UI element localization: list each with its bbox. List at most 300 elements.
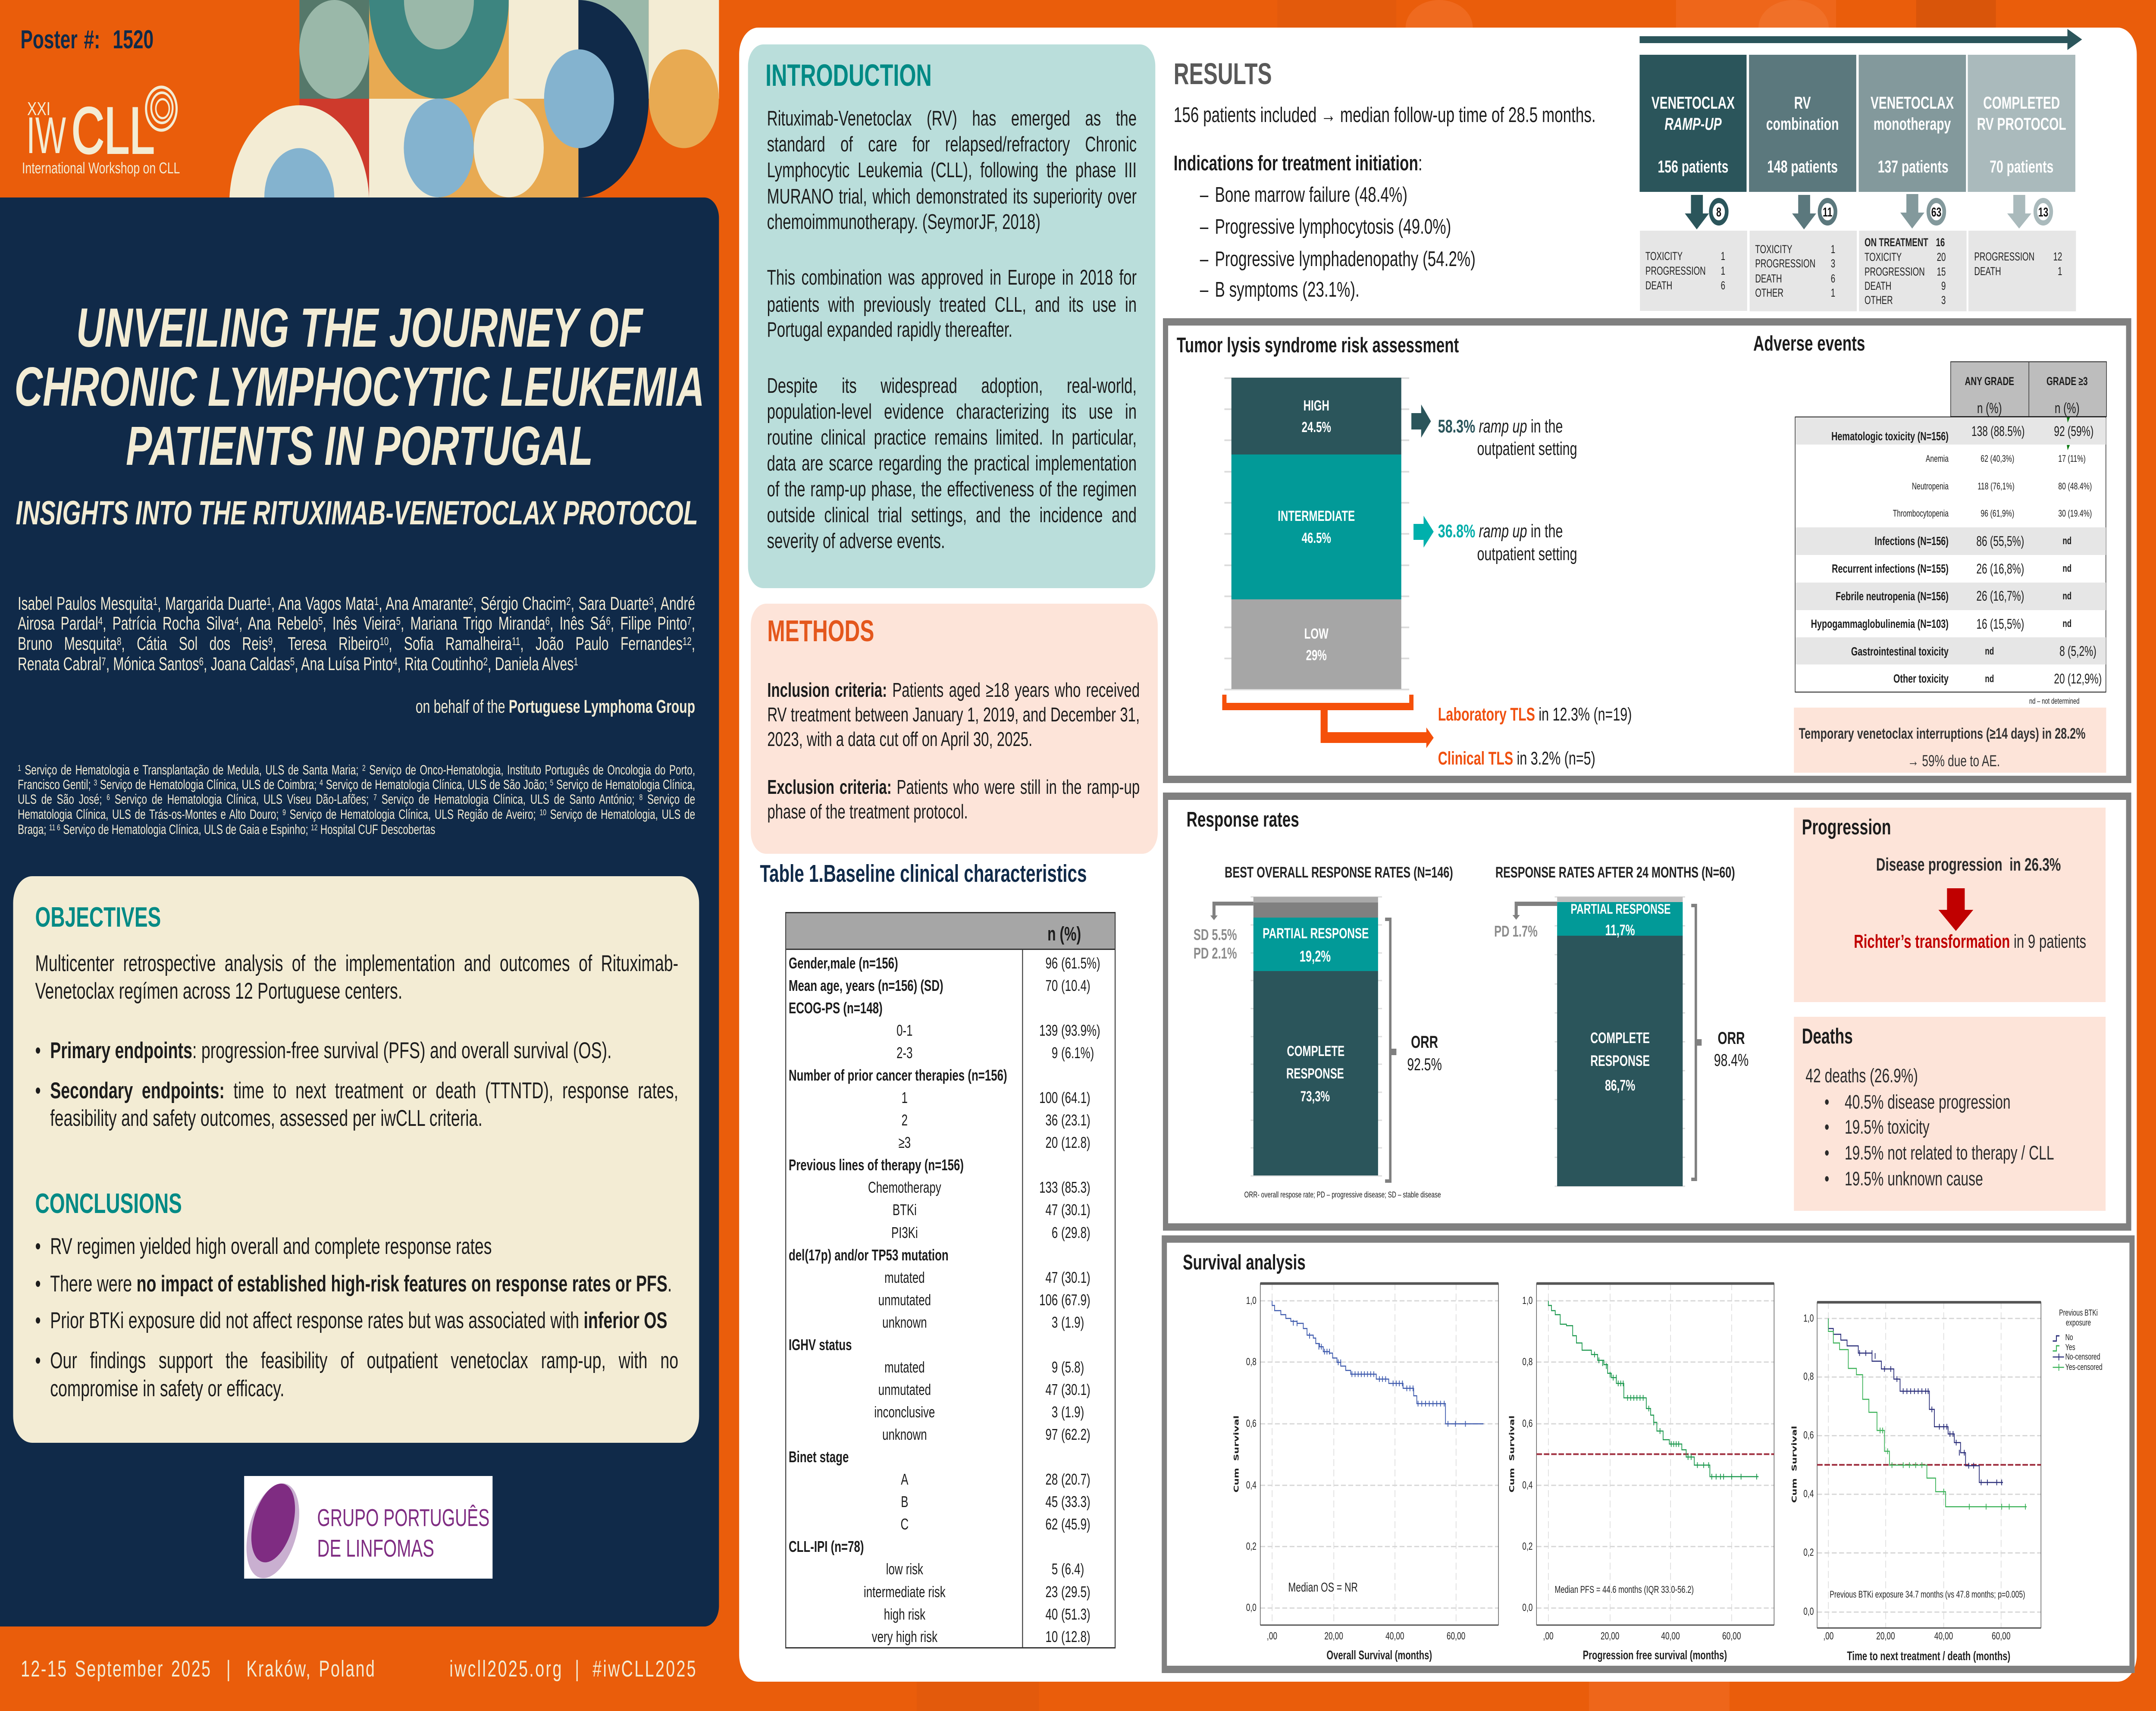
endpoints [35,1039,678,1130]
box: RV combination reasons: 3 [1831,257,1835,270]
axis labels: overall survival plot: 0,6 [1246,1418,1257,1429]
table: adverse events: 8 (5,2%) [2059,643,2096,659]
title: CHRONIC LYMPHOCYTIC LEUKEMIA [14,356,705,418]
introduction text: outside clinical trial settings, and the incidence and [767,504,1137,527]
table: baseline characteristics: (30.1) [1061,1381,1091,1398]
phase: ramp-up: 156 patients [1658,157,1728,176]
logo: Grupo Português de Linfomas: GRUPO PORTUGUÊS [317,1504,489,1532]
subtitle: INSIGHTS INTO THE RITUXIMAB-VENETOCLAX PROTOCOL [16,494,698,532]
objectives text [35,952,678,992]
introduction text [767,108,1137,557]
table: adverse events: nd [2062,535,2071,547]
chart: response after 24 months bar: ORR [1718,1029,1745,1048]
table: baseline characteristics: C [901,1515,909,1533]
phase: monotherapy: VENETOCLAX [1871,94,1954,113]
chart: TLS risk stacked bar: 46.5% [1302,530,1331,546]
legend: previous BTKi exposure: exposure [2066,1318,2091,1328]
axis labels: TTNTD plot: ,00 [1823,1630,1833,1642]
box: ramp-up reasons: 1 [1721,264,1725,277]
heading: results: RESULTS [1174,57,1272,91]
arrow: progression to Richter [1938,888,1973,931]
table: baseline characteristics: 100 [1039,1089,1058,1106]
table: baseline characteristics: CLL-IPI (n=78) [789,1538,864,1555]
panel: deaths: • [1824,1142,1829,1164]
table: adverse events: 80 (48.4%) [2058,481,2092,492]
box: ramp-up reasons [1640,231,1747,311]
chart: TLS risk stacked bar: 24.5% [1302,419,1331,436]
callout: venetoclax interruptions: Temporary venetoclax interruptions (≥14 days) in 28.2% [1799,725,2085,742]
table: adverse events: 26 (16,7%) [1976,588,2024,604]
phase: monotherapy [1859,55,1966,192]
table: baseline characteristics: (1.9) [1061,1403,1084,1421]
panel: deaths: Deaths [1802,1024,1853,1048]
axis labels: TTNTD plot: 0,6 [1803,1429,1814,1441]
conclusions list: • [35,1271,41,1297]
table: baseline characteristics: (12.8) [1061,1628,1091,1645]
table: baseline characteristics: 36 [1045,1111,1058,1129]
table: baseline characteristics: (61.5%) [1061,954,1100,972]
bracket arrow: TLS incidence [1222,694,1435,749]
axis labels: TTNTD plot: 0,2 [1803,1547,1814,1558]
table: baseline characteristics: mutated [884,1358,925,1376]
box: monotherapy reasons: PROGRESSION [1865,265,1925,278]
phase: completed: RV PROTOCOL [1977,115,2066,134]
box: completed reasons: 12 [2053,250,2062,263]
panel: introduction [748,44,1155,588]
table: baseline characteristics: 5 [1052,1560,1058,1578]
callout: high risk outpatient: 58.3% ramp up in the [1438,416,1563,437]
table: adverse events: ANY GRADE [1965,375,2014,388]
axis labels: TTNTD plot: 0,0 [1803,1606,1814,1617]
phase: RV combination: combination [1766,115,1839,134]
table: baseline characteristics: 2-3 [896,1044,913,1062]
axis labels: PFS plot: 0,0 [1522,1602,1532,1614]
chart: best overall response bar: ORR [1411,1033,1438,1052]
table: adverse events: 92 (59%) [2054,423,2093,439]
table: baseline characteristics: 3 [1052,1313,1058,1331]
conclusions list: • [35,1348,41,1373]
heading: adverse events: Adverse events [1753,332,1865,355]
box: monotherapy reasons: 3 [1941,294,1946,307]
box: completed reasons: 1 [2058,265,2062,278]
table: adverse events: 118 (76,1%) [1977,481,2015,492]
endpoints: • [35,1078,41,1103]
table: adverse events: nd [2062,590,2071,602]
callout: venetoclax interruptions [1794,708,2106,773]
arrows: discontinuation counts: 8 [1716,204,1721,219]
axis labels: TTNTD plot: 40,00 [1934,1630,1953,1642]
chart: Kaplan-Meier curves [1161,1229,2139,1682]
methods text: 2023, with a data cut off on April 30, 2025. [767,728,1032,750]
introduction text: data are scarce regarding the practical implementation [767,452,1137,475]
box: RV combination reasons: OTHER [1755,286,1783,299]
conclusions list: • [35,1308,41,1333]
axis labels: PFS plot: 1,0 [1522,1295,1532,1307]
axis labels: overall survival plot: 0,2 [1246,1541,1257,1552]
introduction text: This combination was approved in Europe in 2018 for [767,266,1137,289]
results summary: 156 patients included → median follow-up time of 28.5 months. [1174,103,1596,127]
phase: RV combination: RV [1794,94,1811,113]
axis labels: overall survival plot: 40,00 [1385,1630,1404,1642]
introduction text: MURANO trial, which demonstrated its superiority over [767,185,1137,208]
axis labels: TTNTD plot: Previous BTKi exposure 34.7 months (vs 47.8 months; p=0.005) [1830,1589,2025,1600]
box: monotherapy reasons: ON TREATMENT [1865,236,1928,249]
chart: response after 24 months bar: PARTIAL RESPONSE [1570,901,1671,917]
callout: high risk outpatient [1438,417,1566,459]
table: adverse events: 62 (40,3%) [1981,453,2014,464]
table: baseline characteristics: 0-1 [896,1022,913,1039]
introduction text: patients with previously treated CLL, and its use in [767,293,1137,317]
table: baseline characteristics: (6.4) [1061,1560,1084,1578]
box: completed reasons [1968,231,2076,311]
chart: best overall response bar: PARTIAL RESPONSE [1263,925,1369,942]
chart: response after 24 months bar: RESPONSE [1590,1053,1650,1069]
footer: website and hashtag: iwcll2025.org | #iwCLL2025 [449,1656,697,1682]
arrows: discontinuation counts: 13 [2038,204,2048,219]
title: PATIENTS IN PORTUGAL [126,415,593,477]
arrow: high risk [1411,404,1431,438]
axis labels: TTNTD plot: 0,4 [1803,1488,1814,1500]
legend: previous BTKi exposure: Yes-censored [2065,1363,2103,1372]
table: baseline characteristics: B [901,1493,908,1510]
introduction text: of the ramp-up phase, the effectiveness of the regimen [767,478,1137,501]
table: baseline characteristics: inconclusive [874,1403,935,1421]
axis labels: overall survival plot: 20,00 [1324,1630,1343,1642]
table: baseline characteristics: Previous lines of therapy (n=156) [789,1156,964,1174]
indications list: – [1200,247,1208,271]
on behalf of group: on behalf of the Portuguese Lymphoma Group [416,697,695,717]
table: baseline characteristics [785,912,1116,1648]
table: baseline characteristics: 9 [1052,1044,1058,1062]
box: RV combination reasons: PROGRESSION [1755,257,1815,270]
box: RV combination reasons: DEATH [1755,272,1782,285]
panel: progression: Richter’s transformation in 9 patients [1854,931,2086,952]
table: baseline characteristics: (29.8) [1061,1224,1091,1241]
box: monotherapy reasons [1859,231,1967,311]
chart: TLS risk stacked bar: HIGH [1304,398,1329,414]
table: adverse events: Neutropenia [1912,481,1949,492]
table: adverse events: Gastrointestinal toxicity [1851,645,1949,658]
chart: best overall response bar [1189,896,1433,1185]
affiliations [18,763,695,837]
table: baseline characteristics: IGHV status [789,1336,852,1354]
phase: completed [1968,55,2075,192]
panel: deaths: 19.5% unknown cause [1845,1168,1983,1190]
arrow: timeline [1639,29,2082,50]
arrow: intermediate risk [1413,516,1434,548]
table: baseline characteristics: 70 [1045,977,1058,994]
axis labels: PFS plot: 0,6 [1522,1418,1532,1429]
table: adverse events: 17 (11%) [2058,453,2086,464]
box: completed reasons: DEATH [1974,265,2001,278]
callout: high risk outpatient: outpatient setting [1477,439,1577,459]
conclusions list: compromise in safety or efficacy. [50,1376,285,1401]
chart: best overall response bar: SD 5.5% [1194,926,1237,943]
subheading: after 24 months: RESPONSE RATES AFTER 24 MONTHS (N=60) [1495,864,1735,881]
panel: progression: Disease progression in 26.3% [1876,854,2061,874]
table: adverse events: 86 (55,5%) [1976,533,2024,549]
table: baseline characteristics: 47 [1045,1381,1058,1398]
box: monotherapy reasons: 9 [1941,279,1946,292]
phase: monotherapy: 137 patients [1878,157,1949,176]
panel: deaths [1794,1017,2106,1211]
panel: deaths: • [1824,1091,1829,1113]
axis labels: overall survival plot: Cum Survival [1232,1416,1241,1492]
methods text: RV treatment between January 1, 2019, and December 31, [767,703,1140,726]
box: completed reasons: PROGRESSION [1974,250,2034,263]
box: ramp-up reasons: TOXICITY [1645,250,1683,263]
table: baseline characteristics: (51.3) [1061,1605,1091,1623]
phase: RV combination: 148 patients [1767,157,1838,176]
heading: TLS: Tumor lysis syndrome risk assessment [1177,333,1459,357]
endpoints: Secondary endpoints: time to next treatment or death (TTNTD), response rates, [50,1078,678,1103]
callout: laboratory TLS: Laboratory TLS in 12.3% (n=19) [1438,704,1632,725]
chart: response after 24 months bar: 86,7% [1605,1077,1635,1094]
chart: response after 24 months bar: 11,7% [1605,922,1635,939]
legend: previous BTKi exposure: No-censored [2065,1352,2100,1362]
table: adverse events: Anemia [1926,453,1949,464]
axis labels: PFS plot: 60,00 [1722,1630,1741,1642]
heading: introduction: INTRODUCTION [765,59,932,93]
box: monotherapy reasons: 16 [1936,236,1945,249]
table: baseline characteristics: 47 [1045,1269,1058,1286]
axis labels: overall survival plot: 0,0 [1246,1602,1257,1614]
table: baseline characteristics: unknown [882,1313,927,1331]
table: baseline characteristics: 1 [902,1089,908,1106]
axis labels: PFS plot: 0,4 [1522,1479,1532,1491]
objectives text: Venetoclax regímen across 12 Portuguese centers. [35,978,402,1004]
boxes: discontinuation reasons [1640,231,2076,311]
callout: intermediate risk outpatient [1438,522,1566,564]
panel: title and authors [0,197,719,1626]
title: UNVEILING THE JOURNEY OF [76,297,643,359]
legend: previous BTKi exposure: Yes [2065,1343,2075,1352]
table: baseline characteristics: (62.2) [1061,1426,1091,1443]
callout: venetoclax interruptions: → 59% due to AE. [1908,752,2000,770]
endpoints: feasibility and safety outcomes, assessed per iwCLL criteria. [50,1106,483,1131]
conclusions list [35,1235,678,1403]
axis labels: overall survival plot: Overall Survival (months) [1326,1648,1432,1662]
table: baseline characteristics: 9 [1052,1358,1058,1376]
indications list: B symptoms (23.1%). [1215,278,1360,301]
panel: main white panel [739,28,2137,1682]
logo: Grupo Português de Linfomas: DE LINFOMAS [317,1535,434,1562]
table: baseline characteristics: 133 [1039,1178,1058,1196]
authors: Bruno Mesquita8, Cátia Sol dos Reis9, Teresa Ribeiro10, Sofia Ramalheira11, João Paulo Fernandes12, [18,634,695,654]
indications list: Indications for treatment initiation: [1174,151,1423,175]
table: baseline characteristics: 139 [1039,1022,1058,1039]
table: adverse events: 26 (16,8%) [1976,561,2024,577]
chart: best overall response bar: 92.5% [1407,1055,1442,1074]
table: baseline characteristics: (45.9) [1061,1515,1091,1533]
heading: methods: METHODS [767,614,874,648]
axis labels: PFS plot: 20,00 [1601,1630,1619,1642]
chart: best overall response bar: 73,3% [1300,1088,1330,1105]
table: adverse events: nd [1985,673,1994,685]
table: adverse events: 96 (61,9%) [1981,508,2014,519]
table: baseline characteristics: 97 [1045,1426,1058,1443]
table: baseline characteristics: 2 [902,1111,908,1129]
table: adverse events: Infections (N=156) [1874,534,1949,548]
axis labels: TTNTD plot [1787,1311,2047,1664]
poster number: Poster #: 1520 [20,25,154,54]
table: baseline characteristics: (20.7) [1061,1470,1091,1488]
axis labels: overall survival plot: 0,4 [1246,1479,1257,1491]
authors [18,595,695,673]
axis labels: PFS plot: 0,8 [1522,1356,1532,1368]
axis labels: PFS plot: ,00 [1543,1630,1554,1642]
logo: Grupo Português de Linfomas [244,1476,492,1579]
table: baseline characteristics: (23.1) [1061,1111,1091,1129]
affiliations: ULS de São José; 6 Serviço de Hematologia Clínica, ULS Viseu Dão-Lafões; 7 Serviço de Hematologia Clínica, ULS de Santo António; 8 Serviço de [18,791,695,807]
table: baseline characteristics: Number of prior cancer therapies (n=156) [789,1066,1007,1084]
methods text: Exclusion criteria: Patients who were still in the ramp-up [767,776,1140,798]
indications list: Progressive lymphocytosis (49.0%) [1215,215,1451,238]
endpoints: Primary endpoints: progression-free survival (PFS) and overall survival (OS). [50,1038,612,1063]
table: baseline characteristics: 47 [1045,1201,1058,1219]
panel: deaths: 42 deaths (26.9%) [1805,1065,1918,1087]
panel: survival frame [1162,1235,2134,1673]
box: RV combination reasons: 1 [1831,286,1835,299]
axis labels: PFS plot: 40,00 [1661,1630,1680,1642]
table: baseline characteristics: mutated [884,1269,925,1286]
callout: intermediate risk outpatient: 36.8% ramp up in the [1438,521,1563,542]
table: baseline characteristics: 10 [1045,1628,1058,1645]
table: baseline characteristics: Gender,male (n=156) [789,954,898,972]
panel: objectives and conclusions [13,876,699,1443]
chart: response after 24 months bar: COMPLETE [1590,1030,1650,1047]
indications list [1174,151,1510,302]
phase: RV combination [1749,55,1856,192]
panel: response rates frame [1163,793,2131,1231]
box: ramp-up reasons: 6 [1721,279,1725,292]
table: baseline characteristics: high risk [884,1605,925,1623]
chart: best overall response bar: PD 2.1% [1194,944,1237,962]
legend: previous BTKi exposure: No [2065,1333,2073,1342]
indications list: – [1200,215,1208,238]
table: baseline characteristics: Chemotherapy [868,1178,941,1196]
authors: Renata Cabral7, Mónica Santos6, Joana Caldas5, Ana Luísa Pinto4, Rita Coutinho2, Daniela Alves1 [18,654,578,674]
footnote: response abbreviations: ORR- overall respose rate; PD – progressive disease; SD – stable disease [1244,1190,1441,1200]
chart: response after 24 months bar: 98.4% [1714,1051,1749,1070]
box: monotherapy reasons: OTHER [1865,294,1893,307]
table: adverse events: Recurrent infections (N=155) [1832,562,1949,575]
logo: iwCLL [19,82,189,181]
axis labels: TTNTD plot: Time to next treatment / death (months) [1847,1649,2010,1663]
conclusions list: Prior BTKi exposure did not affect response rates but was associated with inferior OS [50,1308,667,1333]
table: baseline characteristics: (93.9%) [1061,1022,1100,1039]
axis labels: overall survival plot: ,00 [1267,1630,1277,1642]
table: baseline characteristics: 96 [1045,954,1058,972]
table: baseline characteristics: very high risk [872,1628,937,1645]
box: RV combination reasons: 1 [1831,243,1835,256]
table: baseline characteristics: 106 [1039,1291,1058,1309]
axis labels: overall survival plot: 60,00 [1447,1630,1465,1642]
conclusions list: There were no impact of established high-risk features on response rates or PFS. [50,1271,672,1297]
chart: TLS risk stacked bar [1224,378,1409,690]
table: adverse events: Hypogammaglobulinemia (N=103) [1811,617,1949,630]
table: baseline characteristics: unmutated [878,1291,931,1309]
panel: deaths: • [1824,1116,1829,1138]
indications list: Progressive lymphadenopathy (54.2%) [1215,247,1476,271]
table: baseline characteristics: (5.8) [1061,1358,1084,1376]
legend: previous BTKi exposure [2047,1307,2118,1373]
table: adverse events: Febrile neutropenia (N=156) [1836,589,1949,603]
callout: clinical TLS: Clinical TLS in 3.2% (n=5) [1438,748,1595,769]
box: monotherapy reasons: 20 [1937,251,1946,263]
methods text [767,680,1140,827]
panel: TLS and adverse events frame [1163,318,2131,783]
title [0,298,719,467]
introduction text: routine clinical practice remains limited. In particular, [767,426,1137,449]
panel: progression [1794,808,2106,1002]
box: ramp-up reasons: DEATH [1645,279,1672,292]
table: baseline characteristics: BTKi [893,1201,917,1219]
axis labels: overall survival plot: 0,8 [1246,1356,1257,1368]
box: monotherapy reasons: 15 [1937,265,1946,278]
phase: completed: 70 patients [1990,157,2053,176]
axis labels: PFS plot: Cum Survival [1508,1416,1516,1492]
table: adverse events: nd [1985,646,1994,657]
table: adverse events: 20 (12,9%) [2054,671,2102,686]
introduction text: Portugal expanded rapidly thereafter. [767,318,1012,342]
table: baseline characteristics: 23 [1045,1583,1058,1601]
table: baseline characteristics: (30.1) [1061,1201,1091,1219]
table: adverse events: n (%) [2055,400,2080,417]
table: baseline characteristics: (6.1%) [1061,1044,1094,1062]
table: adverse events: GRADE ≥3 [2046,375,2088,388]
affiliations: Francisco Gentil; 3 Serviço de Hematologia Clínica, ULS de Coimbra; 4 Serviço de Hematologia Clínica, ULS de São João; 5 Serviço de Hematologia Clínica, [18,777,695,792]
table: baseline characteristics: (29.5) [1061,1583,1091,1601]
axis labels: PFS plot: 0,2 [1522,1541,1532,1552]
table: baseline characteristics: (1.9) [1061,1313,1084,1331]
table: baseline characteristics: del(17p) and/or TP53 mutation [789,1246,949,1264]
box: ramp-up reasons: 1 [1721,250,1725,263]
axis labels: TTNTD plot: 60,00 [1992,1630,2010,1642]
table: adverse events: 30 (19.4%) [2058,508,2092,519]
panel: deaths: 19.5% toxicity [1845,1116,1930,1138]
conclusions list: RV regimen yielded high overall and complete response rates [50,1234,492,1259]
table: adverse events: Thrombocytopenia [1893,508,1949,519]
footnote: nd: nd – not determined [2029,696,2080,705]
arrows: discontinuation counts: 11 [1823,204,1832,219]
heading: response rates: Response rates [1187,808,1299,831]
logo: iwCLL: CLL [72,94,155,167]
box: monotherapy reasons: DEATH [1865,279,1891,292]
panel: deaths: • [1824,1168,1829,1190]
heading: survival analysis: Survival analysis [1183,1250,1306,1274]
table: baseline characteristics: (10.4) [1061,977,1091,994]
panel: deaths: 40.5% disease progression [1845,1091,2011,1113]
chart: TLS risk stacked bar: LOW [1304,626,1329,642]
arrows: discontinuation counts: 63 [1931,204,1941,219]
panel: deaths: 19.5% not related to therapy / CLL [1845,1142,2054,1164]
introduction text: Lymphocytic Leukemia (CLL), following the phase III [767,159,1137,182]
table: adverse events: 138 (88.5%) [1971,423,2025,439]
chart: TLS risk stacked bar: 29% [1306,647,1327,664]
phase: ramp-up: VENETOCLAX [1651,94,1735,113]
chart: TLS risk stacked bar: INTERMEDIATE [1278,508,1355,524]
phase: monotherapy: monotherapy [1874,115,1951,134]
introduction text: population-level evidence characterizing its use in [767,400,1137,423]
box: RV combination reasons: 6 [1831,272,1835,285]
logo: iwCLL: International Workshop on CLL [22,160,180,177]
table: adverse events: Other toxicity [1893,672,1949,685]
table: baseline characteristics: 62 [1045,1515,1058,1533]
table: baseline characteristics: unmutated [878,1381,931,1398]
introduction text: severity of adverse events. [767,530,945,553]
legend: previous BTKi exposure: Previous BTKi [2059,1308,2098,1318]
